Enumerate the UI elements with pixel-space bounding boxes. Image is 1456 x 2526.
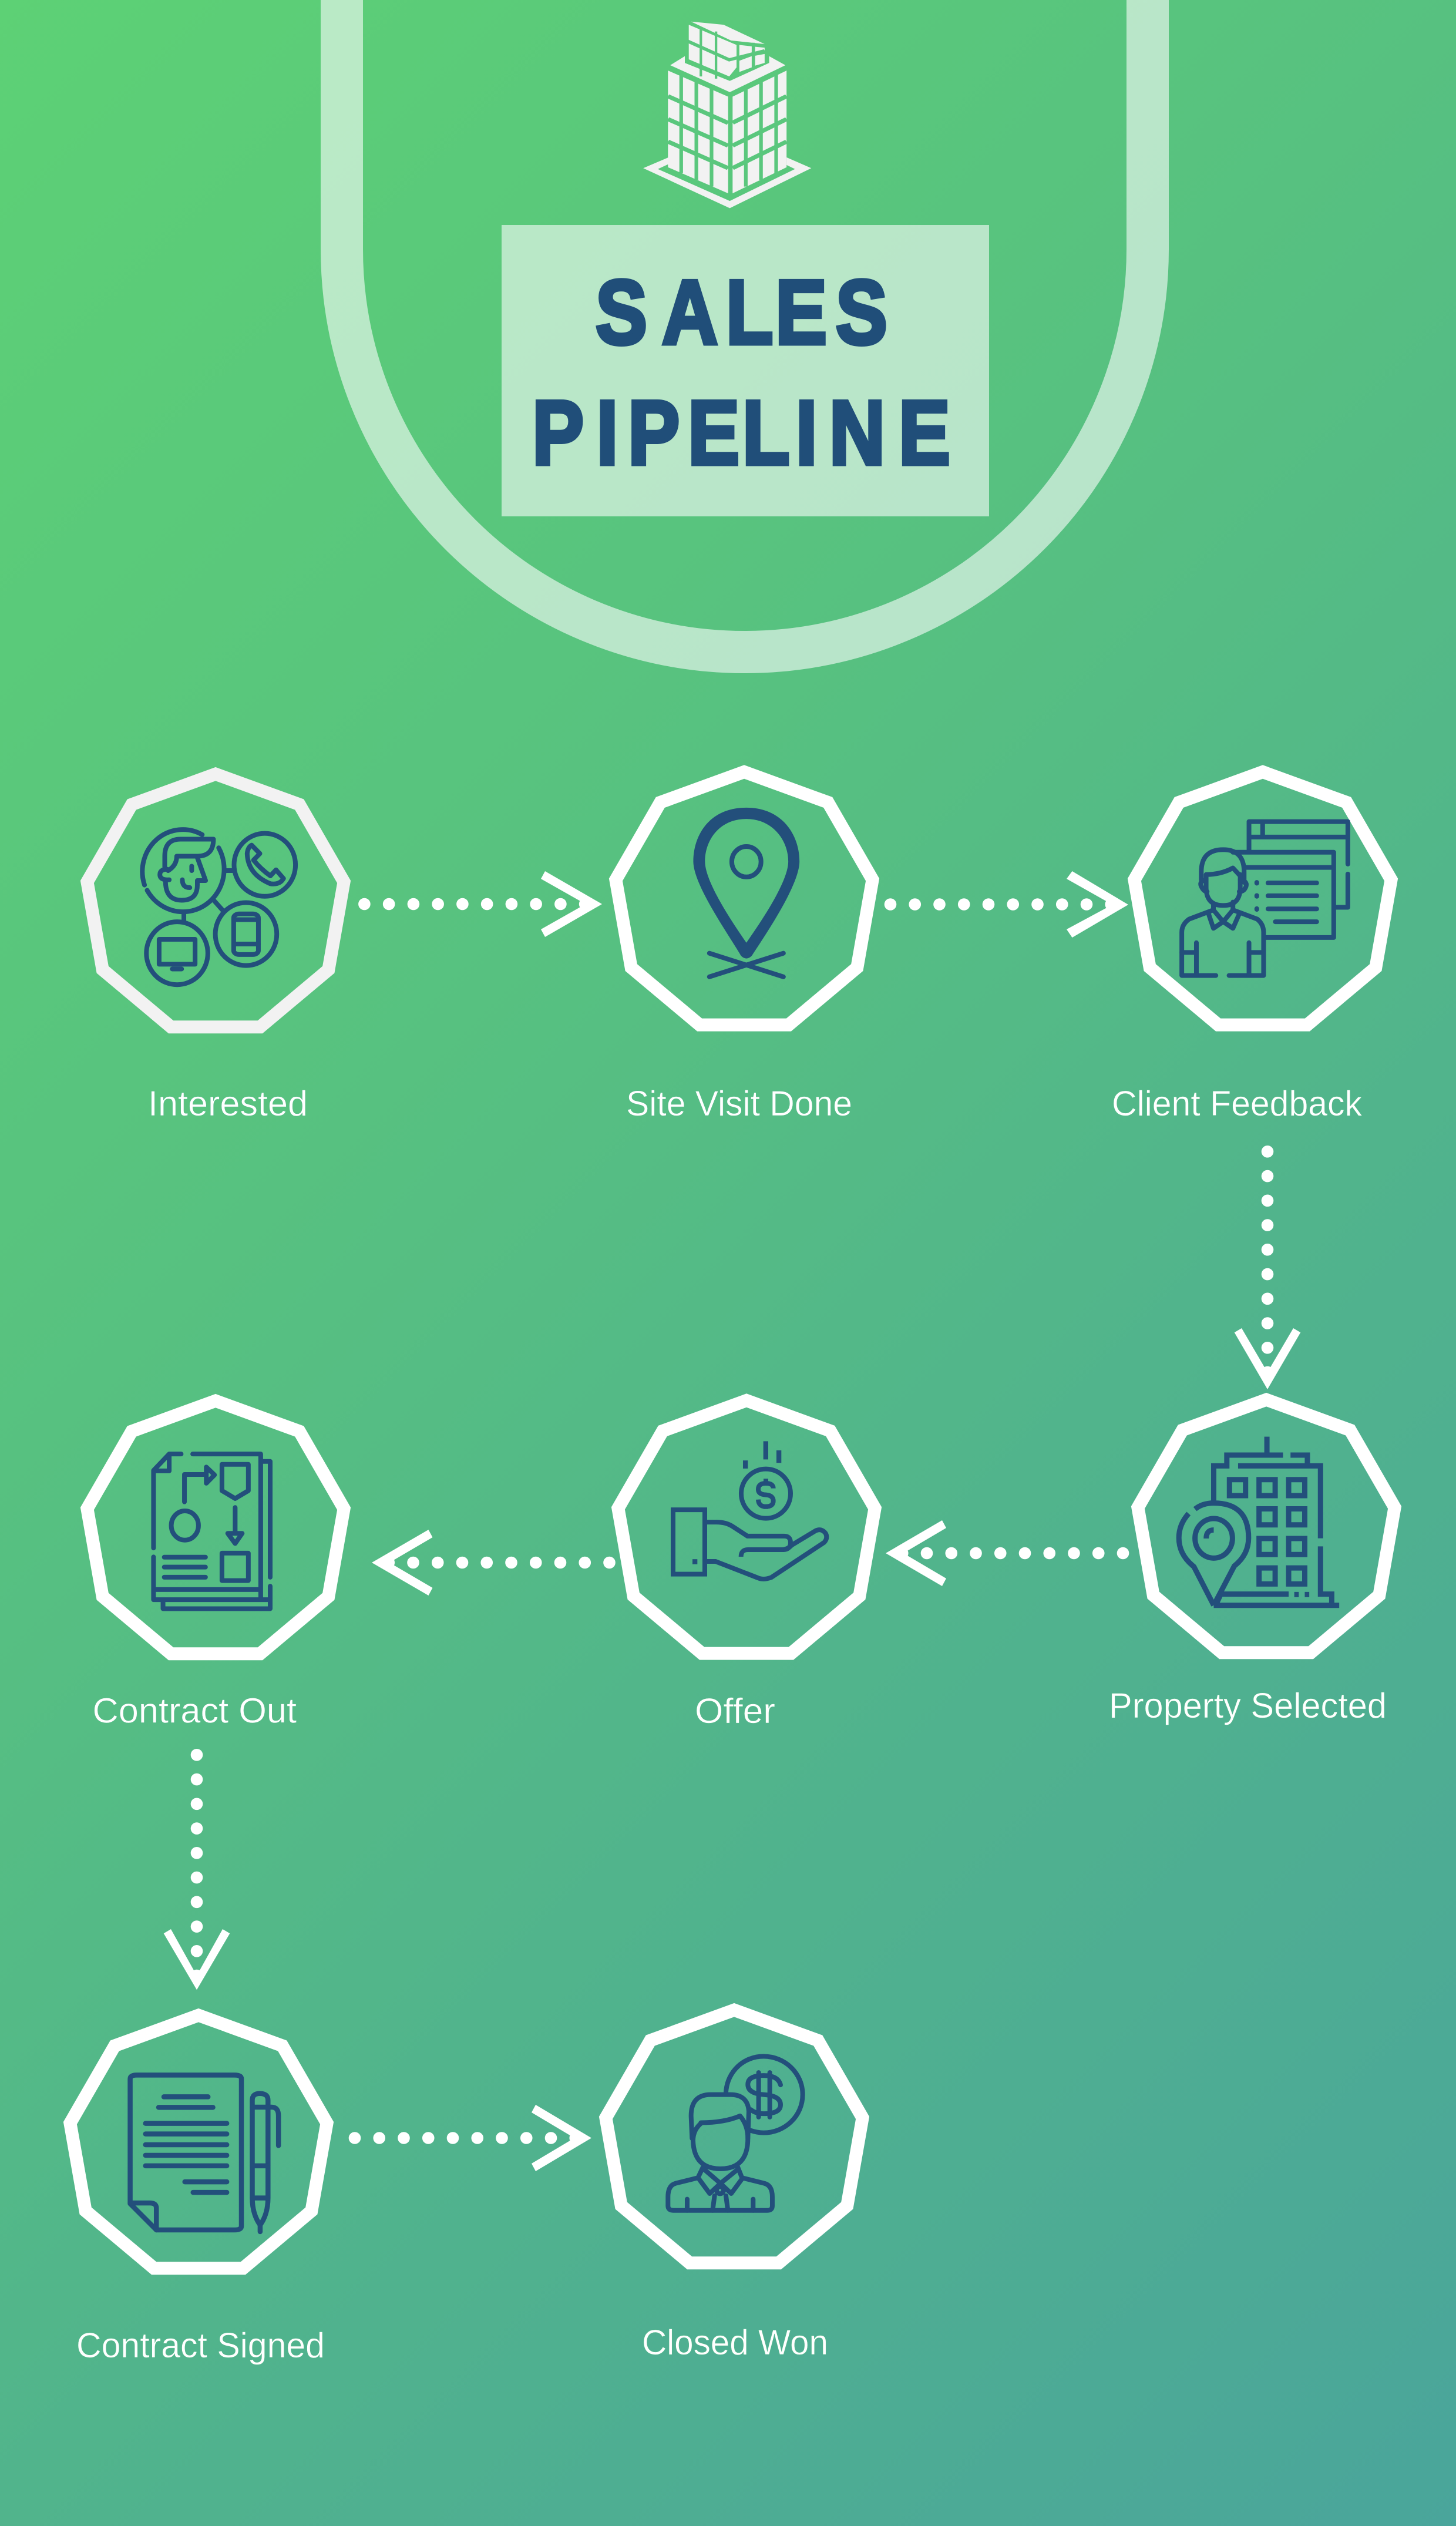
title text: PIPELINE xyxy=(532,382,950,483)
step: Site Visit Done xyxy=(616,772,873,1123)
step: Closed Won xyxy=(606,2010,863,2362)
step: Property Selected xyxy=(1109,1400,1395,1725)
arrow: Contract Out to Contract Signed xyxy=(164,1755,230,1990)
step: Offer xyxy=(618,1400,875,1731)
icon: building with pin xyxy=(1179,1437,1339,1606)
title text: SALES xyxy=(596,262,887,363)
icon: agent with dollar bubble xyxy=(668,2057,803,2211)
label: Property Selected xyxy=(1109,1686,1387,1725)
arrow: Property Selected to Offer xyxy=(886,1520,1123,1586)
arrow: Offer to Contract Out xyxy=(372,1530,610,1595)
label: Closed Won xyxy=(642,2323,828,2362)
icon: contact channels xyxy=(142,829,295,985)
step: Client Feedback xyxy=(1112,772,1391,1123)
icon: hand with coin xyxy=(673,1441,826,1579)
label: Contract Signed xyxy=(76,2326,325,2365)
step: Contract Signed xyxy=(70,2016,327,2365)
icon: signed document with pen xyxy=(130,2075,278,2232)
arrow: Contract Signed to Closed Won xyxy=(355,2105,591,2171)
arrow: Site Visit Done to Client Feedback xyxy=(890,871,1128,938)
arrow: Client Feedback to Property Selected xyxy=(1235,1151,1300,1389)
arrow: Interested to Site Visit Done xyxy=(364,871,602,937)
icon: office building xyxy=(643,22,811,208)
icon: client with documents xyxy=(1182,822,1348,976)
label: Contract Out xyxy=(93,1691,297,1731)
label: Site Visit Done xyxy=(626,1084,852,1123)
label: Client Feedback xyxy=(1112,1084,1363,1123)
icon: location pin xyxy=(693,808,799,977)
icon: contract flowchart xyxy=(153,1454,270,1608)
header arch xyxy=(342,0,1148,652)
label: Interested xyxy=(148,1084,308,1123)
step: Contract Out xyxy=(87,1401,344,1731)
label: Offer xyxy=(695,1691,775,1731)
step: Interested xyxy=(87,774,344,1123)
title panel xyxy=(502,225,989,516)
